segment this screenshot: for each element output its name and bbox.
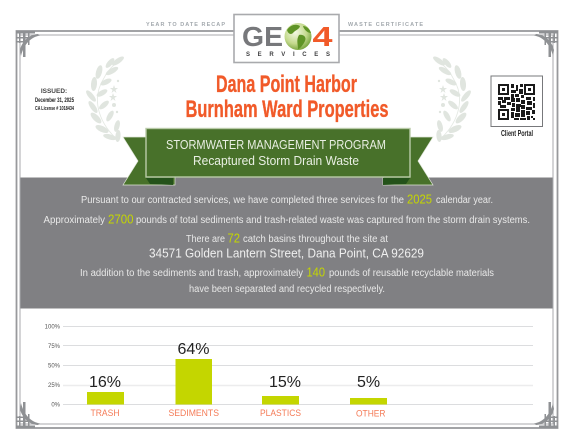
ribbon tail left [123, 137, 175, 185]
ribbon panel [146, 128, 410, 177]
header label: year to date recap: YEAR TO DATE RECAP [146, 22, 225, 28]
bar: sediments: 64% [177, 341, 210, 358]
line: pounds captured: Approximately [44, 215, 105, 226]
line: recyclables [80, 266, 494, 280]
axis labels: 75% [48, 344, 61, 350]
line: services [81, 192, 493, 206]
line: address: 34571 Golden Lantern Street, Dana Point, CA 92629 [149, 246, 424, 260]
body copy [44, 192, 530, 295]
bar: trash: TRASH [90, 408, 120, 419]
line: pounds captured: 2700 [108, 212, 134, 226]
bar: plastics: 15% [269, 374, 301, 391]
ribbon banner [123, 128, 433, 185]
issued details: CA License # 1018434 [35, 106, 74, 112]
line: recyclables: 140 [306, 266, 325, 280]
ribbon tail right [383, 137, 433, 185]
line: services: Pursuant to our contracted services, we have completed three services for the [81, 195, 404, 206]
title: Dana Point Harbor [216, 71, 357, 98]
logo: GEO4 Services: SERVICES [246, 52, 330, 58]
laurel left [85, 55, 125, 142]
logo: GEO4 Services: GE [242, 21, 283, 52]
line: catch basins: catch basins throughout the site at [243, 234, 388, 245]
axis labels: 100% [45, 324, 61, 330]
line: services: calendar year. [436, 195, 493, 206]
bar: trash [87, 374, 124, 419]
logo: GEO4 Services [234, 14, 339, 62]
line: services: 2025 [407, 192, 432, 206]
line: respectively: have been separated and recycled respectively. [189, 284, 385, 295]
header label: waste certificate: WASTE CERTIFICATE [348, 22, 423, 28]
line: recyclables: pounds of reusable recyclable materials [329, 268, 494, 279]
line: catch basins: 72 [228, 232, 240, 246]
title [186, 71, 388, 123]
bar: other [350, 374, 387, 420]
bar: plastics: PLASTICS [260, 408, 301, 419]
ribbon heading: STORMWATER MANAGEMENT PROGRAM [166, 138, 386, 152]
line: recyclables: In addition to the sediments and trash, approximately [80, 268, 303, 279]
title: Burnham Ward Properties [186, 96, 388, 123]
issued details [35, 88, 74, 112]
bar chart [45, 324, 533, 420]
ribbon subheading: Recaptured Storm Drain Waste [193, 154, 359, 168]
issued details: ISSUED: [41, 88, 67, 95]
gray information panel [20, 178, 552, 308]
axis labels [45, 324, 61, 408]
bar: other: 5% [357, 374, 380, 391]
line: catch basins [186, 232, 388, 246]
laurel right [432, 55, 472, 142]
line: catch basins: There are [186, 234, 225, 245]
logo: GEO4 Services: 4 [312, 21, 333, 52]
axis labels: 0% [51, 402, 61, 408]
axis labels: 50% [48, 364, 61, 370]
issued details: December 31, 2025 [35, 97, 74, 104]
line: pounds captured [44, 212, 530, 226]
bar: plastics [260, 374, 301, 419]
QR code: client portal: Client Portal [501, 129, 533, 138]
bar: trash: 16% [89, 374, 121, 391]
bar: sediments [168, 341, 219, 419]
line: pounds captured: pounds of total sediments and trash-related waste was captured from the storm drain systems. [136, 215, 530, 226]
bar: other: OTHER [356, 408, 386, 420]
axis labels: 25% [48, 383, 61, 389]
bar: sediments: SEDIMENTS [168, 408, 219, 419]
QR code: client portal [491, 76, 542, 138]
